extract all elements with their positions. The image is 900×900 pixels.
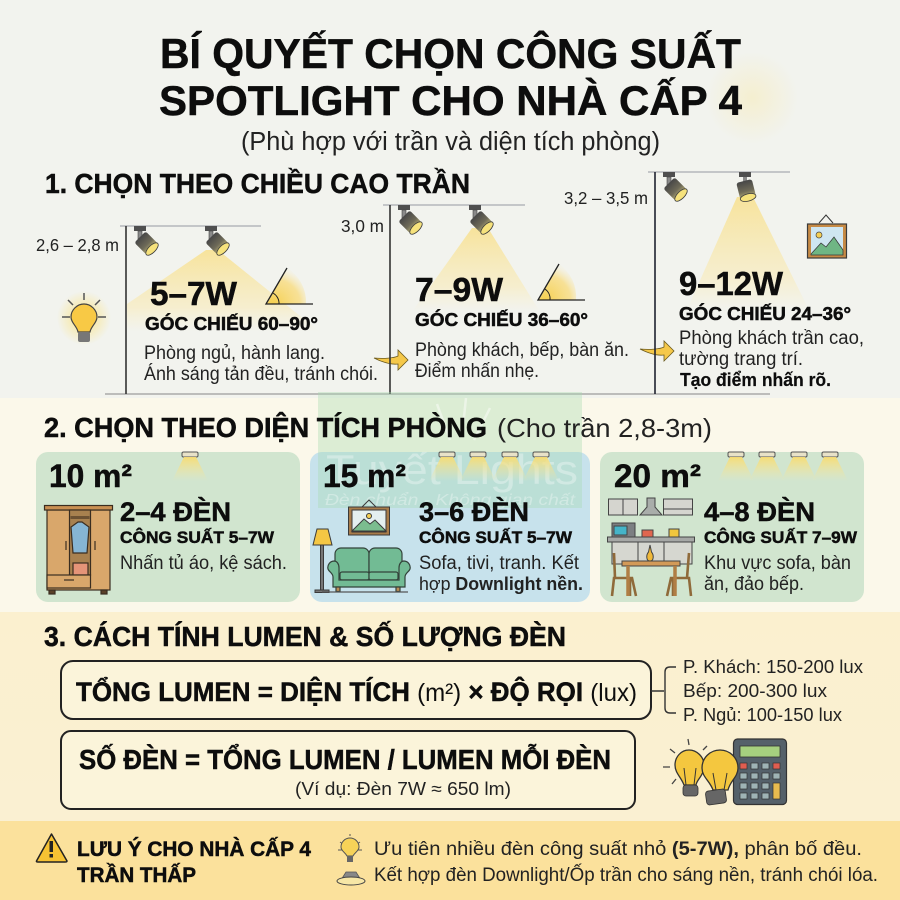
panel: 9-12W (564, 172, 864, 394)
panel: 5-7W (36, 226, 378, 394)
section 1: ceiling height (36, 168, 864, 394)
lux list: P. Khách: 150-200 lux (683, 656, 864, 677)
ceiling and wall lines (383, 205, 525, 394)
beam (412, 228, 540, 312)
ceiling and wall lines (120, 226, 261, 394)
wattage: CÔNG SUẤT 5–7W (120, 528, 275, 547)
spotlights (398, 205, 495, 236)
note heading: LƯU Ý CHO NHÀ CẤP 4 (77, 837, 311, 861)
note heading (77, 837, 311, 887)
card backgrounds (36, 452, 864, 602)
title: SPOTLIGHT CHO NHÀ CẤP 4 (159, 77, 743, 124)
icon: wall picture (808, 215, 846, 258)
note text (374, 839, 878, 886)
arrow (374, 350, 408, 370)
description: Ánh sáng tản đều, tránh chói. (144, 364, 378, 385)
description: Phòng khách, bếp, bàn ăn. (415, 340, 629, 361)
description (415, 340, 629, 382)
section 2 heading (44, 412, 712, 443)
title (159, 29, 743, 124)
description: Sofa, tivi, tranh. Kết (419, 553, 580, 574)
formula box: total lumen: TỔNG LUMEN = DIỆN TÍCH (m²) × ĐỘ RỌI (lux) (76, 676, 637, 707)
ceiling lamps (429, 452, 559, 481)
description: hợp Downlight nền. (419, 573, 583, 594)
beam angle label: GÓC CHIẾU 60–90° (145, 313, 318, 334)
lux list (683, 656, 864, 725)
subtitle: (Phù hợp với trần và diện tích phòng) (241, 128, 660, 156)
panel: 7-9W (341, 205, 629, 394)
footer: note for low ceilings (36, 834, 878, 887)
area: 10 m² (49, 458, 132, 494)
description (144, 343, 378, 385)
ceiling lamps (718, 452, 848, 481)
description: Nhấn tủ áo, kệ sách. (120, 553, 287, 574)
section 3: lumen formula (44, 620, 864, 809)
wattage: 5–7W (150, 275, 238, 312)
area: 20 m² (614, 458, 701, 494)
description: Khu vực sofa, bàn (704, 553, 851, 574)
section 2: room area (36, 392, 864, 602)
lamp count: 4–8 ĐÈN (704, 496, 815, 527)
height label: 2,6 – 2,8 m (36, 235, 119, 255)
icon: wardrobe (44, 506, 112, 594)
lux list: Bếp: 200-300 lux (683, 680, 828, 701)
watermark: Tuyết Lights: Tuyết Lights (326, 446, 578, 493)
wattage: 7–9W (415, 271, 504, 308)
icon: bulbs and calculator (663, 739, 786, 805)
beam angle label: GÓC CHIẾU 36–60° (415, 309, 588, 330)
formula box: lamp count (61, 731, 635, 809)
note text: Ưu tiên nhiều đèn công suất nhỏ (5-7W), phân bố đều. (374, 839, 862, 860)
ceiling and wall lines (648, 172, 790, 394)
spotlights (134, 226, 231, 257)
section 2 heading: 2. CHỌN THEO DIỆN TÍCH PHÒNG (44, 412, 487, 443)
description (704, 553, 851, 595)
description: tường trang trí. (679, 349, 803, 370)
spotlights (663, 172, 757, 203)
icon: beam angle (266, 268, 313, 304)
icon: warning triangle (36, 834, 67, 862)
description: Tạo điểm nhấn rõ. (680, 369, 831, 390)
bracket (651, 667, 676, 713)
icon: beam angle (538, 264, 585, 300)
floor line (105, 393, 770, 395)
ceiling lamp (172, 452, 208, 481)
description (419, 553, 583, 594)
beam (127, 250, 320, 332)
wattage: CÔNG SUẤT 5–7W (419, 528, 573, 547)
arrow (640, 341, 674, 361)
card: 20 m2 (600, 452, 864, 602)
icon: downlight (337, 872, 365, 885)
description: Điểm nhấn nhẹ. (415, 361, 539, 382)
icon: kitchen and dining table (608, 498, 694, 596)
lamp count: 2–4 ĐÈN (120, 496, 231, 527)
section 2 heading: (Cho trần 2,8-3m) (497, 413, 712, 443)
note text: Kết hợp đèn Downlight/Ốp trần cho sáng nền, tránh chói lóa. (374, 864, 878, 886)
section 1 heading: 1. CHỌN THEO CHIỀU CAO TRẦN (45, 168, 470, 199)
wattage: CÔNG SUẤT 7–9W (704, 528, 858, 547)
icon: picture (348, 500, 390, 535)
icon: small bulb (338, 834, 362, 862)
icon: glowing bulb (57, 291, 111, 345)
beam angle label: GÓC CHIẾU 24–36° (679, 303, 851, 324)
description: Phòng ngủ, hành lang. (144, 343, 325, 364)
area: 15 m² (323, 458, 406, 494)
card: 15 m2 (310, 452, 590, 602)
title: BÍ QUYẾT CHỌN CÔNG SUẤT (160, 29, 741, 77)
watermark: Tuyết Lights: Đèn chuẩn - Không gian chất (325, 491, 576, 509)
card: 10 m2 (36, 452, 300, 602)
lamp count: 3–6 ĐÈN (419, 496, 529, 527)
description: Phòng khách trần cao, (679, 328, 864, 349)
note heading: TRẦN THẤP (77, 864, 196, 887)
wattage: 9–12W (679, 265, 784, 302)
beam (686, 197, 810, 312)
description (679, 328, 864, 390)
formula box: total lumen (61, 661, 651, 719)
icon: sofa (322, 548, 410, 592)
formula box: lamp count: (Ví dụ: Đèn 7W ≈ 650 lm) (295, 778, 511, 799)
icon: floor lamp (313, 529, 332, 592)
description: ăn, đảo bếp. (704, 574, 804, 595)
height label: 3,0 m (341, 216, 384, 236)
height label: 3,2 – 3,5 m (564, 188, 648, 208)
watermark: Tuyết Lights (318, 392, 582, 509)
formula box: lamp count: SỐ ĐÈN = TỔNG LUMEN / LUMEN MỖI ĐÈN (79, 743, 611, 775)
section 3 heading: 3. CÁCH TÍNH LUMEN & SỐ LƯỢNG ĐÈN (44, 620, 566, 652)
lux list: P. Ngủ: 100-150 lux (683, 704, 843, 725)
